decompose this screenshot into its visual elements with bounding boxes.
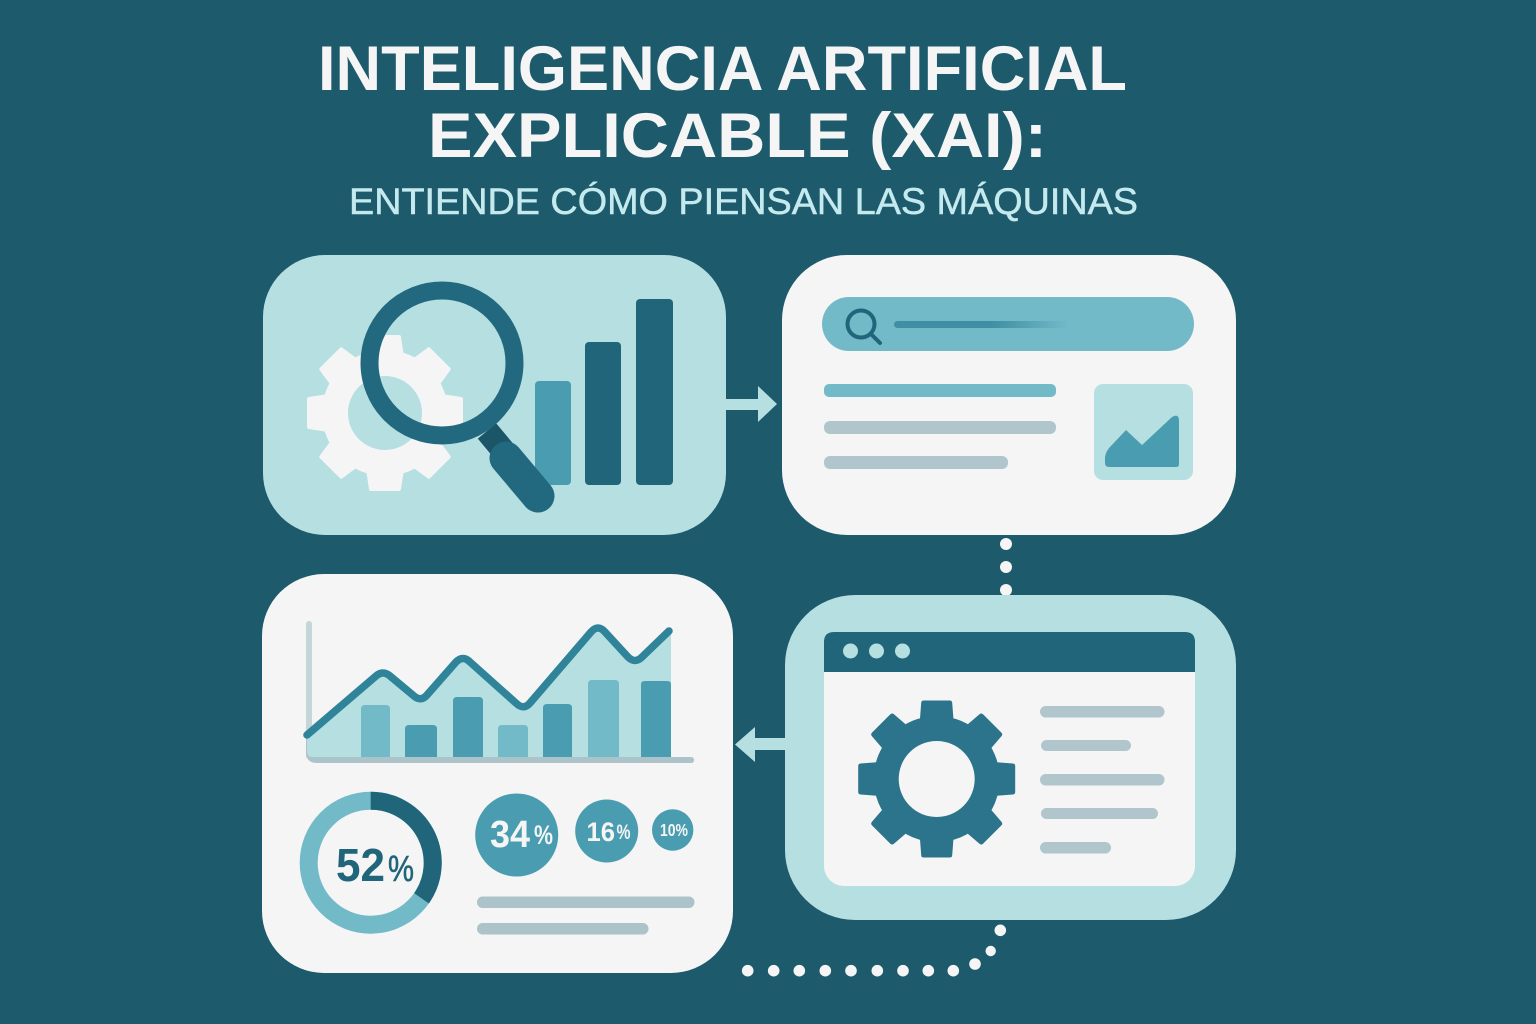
panel: analysis (263, 255, 726, 535)
bubble: 10%: 10% (660, 820, 688, 840)
subtitle: ENTIENDE CÓMO PIENSAN LAS MÁQUINAS (349, 181, 1138, 222)
bubble: 16%: 16 (586, 817, 615, 847)
title: INTELIGENCIA ARTIFICIAL (318, 34, 1127, 104)
text lines (824, 384, 1056, 469)
panel: settings window (785, 595, 1236, 920)
bar chart: rising bars (535, 299, 673, 485)
chart: line and bars (306, 621, 694, 763)
title: EXPLICABLE (XAI): (428, 101, 1047, 171)
icon: small magnifier (848, 310, 880, 343)
panel: search results (782, 255, 1236, 535)
panel: results dashboard (262, 574, 733, 973)
icon: chart thumbnail (1094, 384, 1193, 480)
donut chart: 52% (309, 801, 433, 925)
bubble: 16% (575, 800, 638, 862)
search bar (822, 297, 1194, 351)
icon: magnifying glass (370, 290, 538, 496)
bubble: 34%: % (534, 820, 553, 850)
icon: teal gear (861, 703, 1013, 855)
donut chart: 52%: % (388, 848, 414, 889)
donut chart: 52%: 52 (336, 839, 385, 891)
window (824, 632, 1195, 886)
bubble: 16%: % (616, 821, 631, 844)
text lines (477, 896, 694, 934)
connector: dots from search to settings (1000, 538, 1012, 596)
bubble: 10% (652, 809, 693, 851)
icon: white gear (309, 337, 461, 489)
bubble: 34%: 34 (490, 814, 530, 856)
connector: dots from settings to results (742, 924, 1006, 976)
arrow: analysis to search (726, 386, 777, 422)
bubble: 34% (475, 794, 558, 876)
title (318, 34, 1127, 171)
text lines (1040, 706, 1164, 854)
arrow: settings to results (735, 727, 785, 762)
